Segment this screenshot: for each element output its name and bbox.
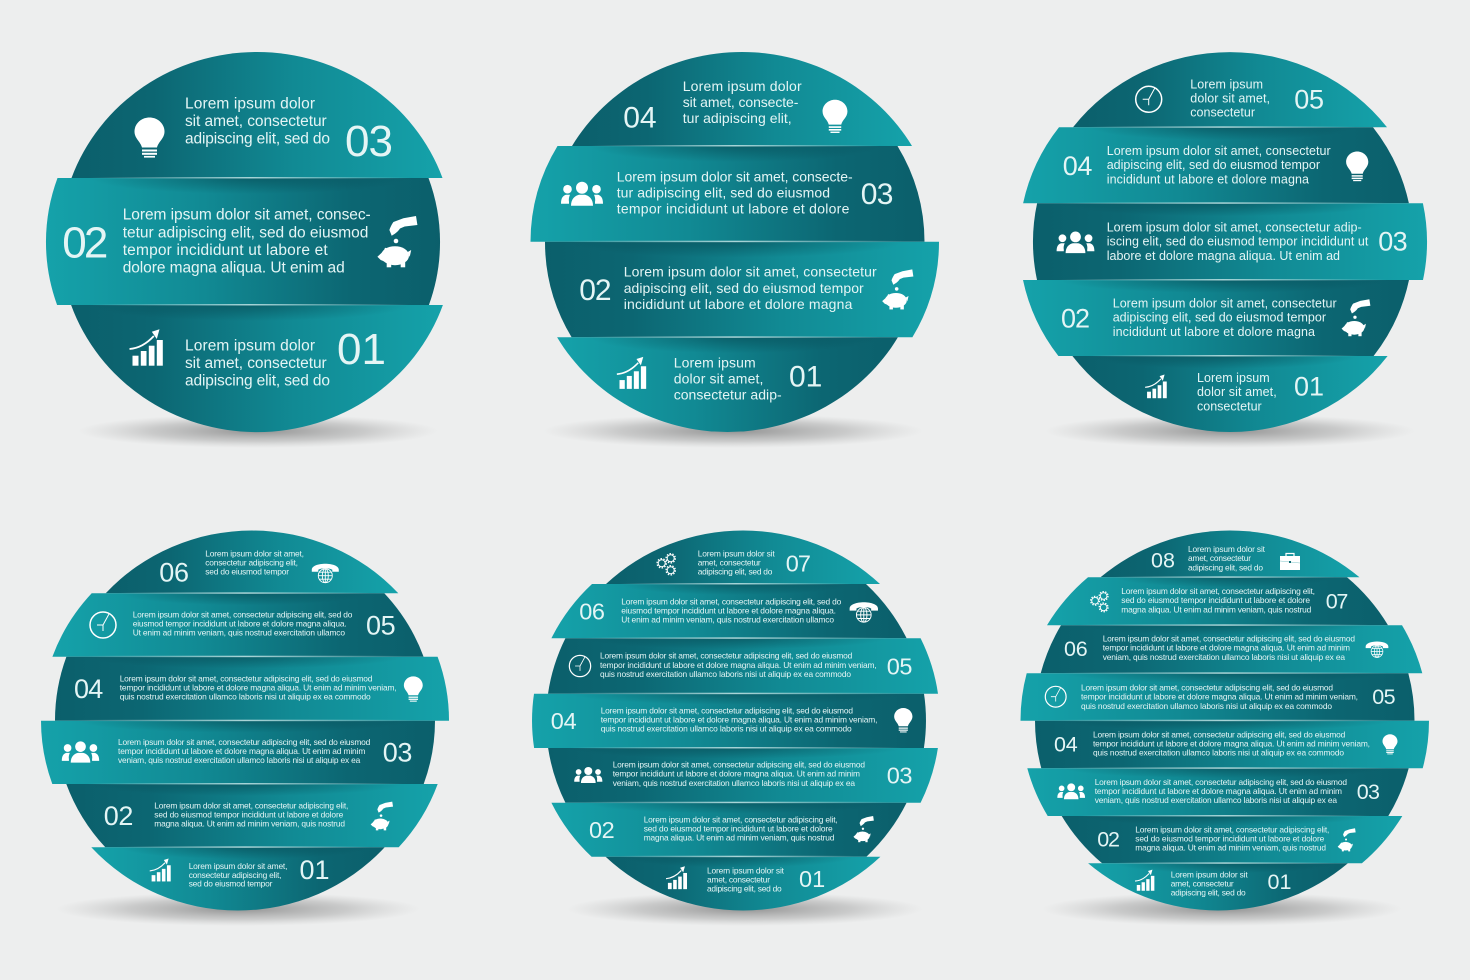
text block 02: Lorem ipsum dolor sit amet, consec- xyxy=(123,206,371,223)
band 02 xyxy=(545,241,939,337)
text block 02: sed do eiusmod tempor incididunt ut labore et dolore xyxy=(644,823,833,833)
icon: gears xyxy=(657,554,675,575)
text block 06: tempor incididunt ut labore et dolore magna aliqua. Ut enim ad minim xyxy=(1103,643,1350,653)
text block 07: amet, consectetur xyxy=(698,557,761,567)
text block 03: Lorem ipsum dolor sit amet, consectetur adipiscing elit, sed do eiusmod xyxy=(1095,777,1347,787)
number 04: 04 xyxy=(623,102,657,135)
text block 03 xyxy=(118,737,371,765)
text block 01 xyxy=(674,355,782,403)
icon: briefcase xyxy=(1280,554,1300,570)
text block 05: Lorem ipsum dolor sit amet, consectetur adipiscing elit, sed do eiusmod xyxy=(600,651,853,661)
text block 02: Lorem ipsum dolor sit amet, consectetur adipiscing elit, xyxy=(1135,824,1329,834)
icon: light bulb xyxy=(1382,734,1398,754)
text block 02: magna aliqua. Ut enim ad minim veniam, quis nostrud xyxy=(154,819,345,829)
text block 01 xyxy=(1197,371,1277,413)
text block 03: tempor incididunt ut labore et dolore xyxy=(617,201,850,217)
text block 06: sed do eiusmod tempor xyxy=(205,567,289,577)
text block 05 xyxy=(600,651,877,679)
text block 02: sed do eiusmod tempor incididunt ut labore et dolore xyxy=(1135,833,1325,843)
text block 04: Lorem ipsum dolor sit amet, consectetur adipiscing elit, sed do eiusmod xyxy=(120,674,373,684)
number 03: 03 xyxy=(1378,227,1408,257)
icon: globe phone xyxy=(1366,641,1388,657)
text block 02: Lorem ipsum dolor sit amet, consectetur xyxy=(624,264,877,280)
infographic: five-slice circle xyxy=(1023,52,1427,432)
band 06 xyxy=(106,531,398,593)
text block 01: Lorem ipsum xyxy=(1197,371,1270,385)
icon: light bulb xyxy=(1346,152,1368,181)
text block 03: tempor incididunt ut labore et dolore magna aliqua. Ut enim ad minim xyxy=(118,746,365,756)
text block 04: sit amet, consecte- xyxy=(683,94,799,110)
band 05 xyxy=(52,592,424,657)
number 03: 03 xyxy=(1357,780,1380,804)
text block 02: magna aliqua. Ut enim ad minim veniam, quis nostrud xyxy=(1135,842,1326,852)
number 04: 04 xyxy=(1063,151,1092,181)
text block 01: amet, consectetur xyxy=(1171,879,1234,889)
number 06: 06 xyxy=(1064,637,1088,661)
number 02: 02 xyxy=(1061,303,1090,333)
icon: hand and piggy bank xyxy=(882,269,913,309)
text block 08: amet, consectetur xyxy=(1188,553,1251,563)
text block 02: dolore magna aliqua. Ut enim ad xyxy=(123,259,345,276)
text block 01: dolor sit amet, xyxy=(1197,385,1277,399)
text block 05: tempor incididunt ut labore et dolore magna aliqua. Ut enim ad minim veniam, xyxy=(600,660,877,670)
ground shadows xyxy=(56,414,1415,926)
text block 01: adipiscing elit, sed do xyxy=(185,373,330,390)
band 03 xyxy=(72,52,442,178)
number 06: 06 xyxy=(579,598,605,624)
band 01 xyxy=(91,846,385,910)
icon: people xyxy=(574,767,602,783)
text block 05: eiusmod tempor incididunt ut labore et dolore magna aliqua. xyxy=(133,619,347,629)
text block 07: magna aliqua. Ut enim ad minim veniam, quis nostrud xyxy=(1121,604,1312,614)
number 02: 02 xyxy=(579,274,612,307)
text block 04: Lorem ipsum dolor xyxy=(683,78,802,94)
text block 04: Lorem ipsum dolor sit amet, consectetur adipiscing elit, sed do eiusmod xyxy=(601,705,853,715)
text block 05 xyxy=(1190,77,1270,120)
icon: hand and piggy bank xyxy=(853,816,874,842)
text block 03: tur adipiscing elit, sed do eiusmod xyxy=(617,185,830,201)
text block 06: Lorem ipsum dolor sit amet, xyxy=(205,549,304,559)
band 08 xyxy=(1100,530,1360,577)
band 07 xyxy=(1047,576,1388,625)
text block 02: magna aliqua. Ut enim ad minim veniam, quis nostrud xyxy=(644,832,835,842)
icon: hand and piggy bank xyxy=(1342,299,1370,336)
number 01: 01 xyxy=(799,866,825,892)
number 03: 03 xyxy=(861,178,893,211)
text block 07 xyxy=(698,548,775,576)
text block 02: Lorem ipsum dolor sit amet, consectetur adipiscing elit, xyxy=(644,814,838,824)
number 01: 01 xyxy=(300,855,330,885)
text block 08: Lorem ipsum dolor sit xyxy=(1188,544,1266,554)
text block 01: adipiscing elit, sed do xyxy=(1171,888,1246,898)
text block 07: adipiscing elit, sed do xyxy=(698,566,773,576)
text block 01: consectetur adip- xyxy=(674,387,782,403)
icon: hand and piggy bank xyxy=(377,216,417,267)
text block 07: sed do eiusmod tempor incididunt ut labore et dolore xyxy=(1121,595,1310,605)
text block 01: consectetur xyxy=(1197,399,1262,413)
text block 03: tempor incididunt ut labore et dolore magna aliqua. Ut enim ad minim xyxy=(1095,786,1342,796)
band 07 xyxy=(606,531,880,584)
text block 04: Lorem ipsum dolor sit amet, consectetur adipiscing elit, sed do eiusmod xyxy=(1093,729,1346,739)
text block 04: tur adipiscing elit, xyxy=(683,110,792,126)
text block 07 xyxy=(1121,586,1315,614)
icon: light bulb xyxy=(894,708,912,732)
text block 01: consectetur adipiscing elit, xyxy=(189,870,281,880)
text block 02: tempor incididunt ut labore et xyxy=(123,242,328,259)
text block 02: tetur adipiscing elit, sed do eiusmod xyxy=(123,224,368,241)
text block 03: Lorem ipsum dolor xyxy=(185,95,315,112)
number 01: 01 xyxy=(789,361,822,394)
text block 06 xyxy=(205,549,304,577)
text block 04 xyxy=(120,674,397,702)
text block 03 xyxy=(1107,221,1369,263)
text block 07: Lorem ipsum dolor sit xyxy=(698,548,775,558)
icon: hand and piggy bank xyxy=(371,802,393,830)
text block 05: consectetur xyxy=(1190,106,1255,120)
text block 02 xyxy=(154,801,348,829)
icon: growth chart xyxy=(1145,375,1167,398)
band 05 xyxy=(548,637,938,694)
icon: globe phone xyxy=(850,602,878,622)
text block 04 xyxy=(1093,729,1370,757)
band 02 xyxy=(1023,279,1409,356)
icon: growth chart xyxy=(617,357,646,389)
text block 06: Ut enim ad minim veniam, quis nostrud exercitation ullamco xyxy=(621,614,834,624)
text block 05: Lorem ipsum dolor sit amet, consectetur adipiscing elit, sed do xyxy=(133,610,353,620)
number 07: 07 xyxy=(786,551,811,577)
text block 04: adipiscing elit, sed do eiusmod tempor xyxy=(1107,158,1320,172)
number 04: 04 xyxy=(1054,733,1078,757)
icon: clock xyxy=(569,655,591,677)
text block 04 xyxy=(683,78,802,126)
text block 04: quis nostrud exercitation ullamco laboris nisi ut aliquip ex ea commodo xyxy=(601,723,852,733)
text block 04: quis nostrud exercitation ullamco laboris nisi ut aliquip ex ea commodo xyxy=(120,692,371,702)
band 04 xyxy=(1035,720,1429,768)
icon: people xyxy=(561,182,603,206)
icon: hand and piggy bank xyxy=(1338,828,1356,851)
number 05: 05 xyxy=(1372,685,1396,709)
text block 04 xyxy=(601,705,877,733)
text block 04: incididunt ut labore et dolore magna xyxy=(1107,172,1309,186)
number 02: 02 xyxy=(589,817,615,843)
number 01: 01 xyxy=(1294,372,1324,402)
number 01: 01 xyxy=(1268,870,1291,894)
icon: light bulb xyxy=(134,118,164,158)
band 04 xyxy=(532,693,926,748)
text block 06 xyxy=(1103,634,1355,662)
text block 03 xyxy=(1095,777,1347,805)
text block 04: Lorem ipsum dolor sit amet, consectetur xyxy=(1107,144,1331,158)
text block 02: Lorem ipsum dolor sit amet, consectetur adipiscing elit, xyxy=(154,801,348,811)
band 02 xyxy=(1062,815,1402,863)
text block 04: tempor incididunt ut labore et dolore magna aliqua. Ut enim ad minim veniam, xyxy=(1093,738,1370,748)
band 06 xyxy=(1041,624,1422,673)
text block 01: Lorem ipsum dolor sit xyxy=(1171,870,1248,880)
text block 03 xyxy=(185,95,330,147)
text block 01: amet, consectetur xyxy=(707,874,770,884)
number 02: 02 xyxy=(104,801,133,831)
number 07: 07 xyxy=(1326,590,1348,614)
text block 03 xyxy=(613,760,865,788)
icon: growth chart xyxy=(130,329,163,366)
infographic: seven-slice circle xyxy=(532,531,938,911)
text block 01: adipiscing elit, sed do xyxy=(707,883,782,893)
text block 05: Lorem ipsum dolor sit amet, consectetur adipiscing elit, sed do eiusmod xyxy=(1081,683,1333,693)
text block 04: tempor incididunt ut labore et dolore magna aliqua. Ut enim ad minim veniam, xyxy=(601,714,877,724)
number 04: 04 xyxy=(74,674,103,704)
text block 01 xyxy=(707,865,785,893)
text block 06: veniam, quis nostrud exercitation ullamco laboris nisi ut aliquip ex ea xyxy=(1103,652,1345,662)
band 05 xyxy=(1020,672,1414,721)
text block 02 xyxy=(624,264,877,312)
text block 02: incididunt ut labore et dolore magna xyxy=(1113,325,1315,339)
text block 02: Lorem ipsum dolor sit amet, consectetur xyxy=(1113,297,1337,311)
text block 03: veniam, quis nostrud exercitation ullamco laboris nisi ut aliquip ex ea xyxy=(1095,795,1337,805)
band 04 xyxy=(55,656,449,721)
band 03 xyxy=(530,145,924,242)
number 01: 01 xyxy=(337,325,386,374)
icon: light bulb xyxy=(404,676,423,702)
band 05 xyxy=(1073,52,1387,127)
text block 05: quis nostrud exercitation ullamco laboris nisi ut aliquip ex ea commodo xyxy=(600,669,851,679)
text block 06 xyxy=(621,596,842,624)
number 03: 03 xyxy=(383,737,412,767)
text block 08: adipiscing elit, sed do xyxy=(1188,562,1263,572)
infographic: eight-slice circle xyxy=(1020,530,1429,910)
number 05: 05 xyxy=(1294,84,1324,114)
text block 04: quis nostrud exercitation ullamco laboris nisi ut aliquip ex ea commodo xyxy=(1093,747,1344,757)
number 03: 03 xyxy=(887,762,912,788)
number 04: 04 xyxy=(551,708,577,734)
band 03 xyxy=(548,747,938,803)
text block 02: adipiscing elit, sed do eiusmod tempor xyxy=(624,280,864,296)
text block 03: Lorem ipsum dolor sit amet, consecte- xyxy=(617,169,853,185)
text block 02 xyxy=(644,814,838,842)
number 08: 08 xyxy=(1151,549,1175,573)
number 02: 02 xyxy=(62,218,108,267)
text block 03: Lorem ipsum dolor sit amet, consectetur adipiscing elit, sed do eiusmod xyxy=(613,760,865,770)
text block 02 xyxy=(123,206,371,276)
text block 02 xyxy=(1135,824,1329,852)
icon: globe phone xyxy=(312,564,339,583)
band 01 xyxy=(1088,862,1348,910)
number 05: 05 xyxy=(366,610,396,640)
band 02 xyxy=(46,177,440,305)
text block 03: veniam, quis nostrud exercitation ullamco laboris nisi ut aliquip ex ea xyxy=(613,778,855,788)
text block 05: quis nostrud exercitation ullamco laboris nisi ut aliquip ex ea commodo xyxy=(1081,701,1332,711)
text block 02: adipiscing elit, sed do eiusmod tempor xyxy=(1113,311,1326,325)
text block 03 xyxy=(617,169,853,217)
text block 07: Lorem ipsum dolor sit amet, consectetur adipiscing elit, xyxy=(1121,586,1315,596)
text block 01 xyxy=(1171,870,1248,898)
icon: gears xyxy=(1091,592,1108,612)
band 01 xyxy=(606,856,880,911)
band 02 xyxy=(66,783,438,847)
text block 06: consectetur adipiscing elit, xyxy=(205,558,298,568)
text block 01: dolor sit amet, xyxy=(674,371,763,387)
infographic: four-slice circle xyxy=(530,52,939,432)
band 01 xyxy=(1072,355,1388,432)
text block 03: Lorem ipsum dolor sit amet, consectetur adipiscing elit, sed do eiusmod xyxy=(118,737,371,747)
text block 05: Lorem ipsum xyxy=(1190,77,1263,91)
text block 04 xyxy=(1107,144,1331,186)
text block 01 xyxy=(189,861,287,889)
number 06: 06 xyxy=(159,558,189,588)
text block 06: eiusmod tempor incididunt ut labore et dolore magna aliqua. xyxy=(621,605,836,615)
text block 01: Lorem ipsum dolor sit xyxy=(707,865,785,875)
text block 03: labore et dolore magna aliqua. Ut enim ad xyxy=(1107,249,1340,263)
text block 01: Lorem ipsum dolor xyxy=(185,338,315,355)
icon: clock xyxy=(1045,686,1066,707)
text block 03: iscing elit, sed do eiusmod tempor incididunt ut xyxy=(1107,235,1369,249)
number 05: 05 xyxy=(887,653,912,679)
text block 06: Lorem ipsum dolor sit amet, consectetur adipiscing elit, sed do eiusmod xyxy=(1103,634,1355,644)
text block 05: Ut enim ad minim veniam, quis nostrud exercitation ullamco xyxy=(133,628,345,638)
band 04 xyxy=(572,52,912,146)
text block 01: sit amet, consectetur xyxy=(185,355,327,372)
text block 03: adipiscing elit, sed do xyxy=(185,130,330,147)
band 04 xyxy=(1023,126,1409,203)
band 01 xyxy=(71,304,443,432)
icon: growth chart xyxy=(666,866,687,889)
band 03 xyxy=(41,720,435,784)
icon: clock xyxy=(1136,86,1162,112)
text block 04: tempor incididunt ut labore et dolore magna aliqua. Ut enim ad minim veniam, xyxy=(120,683,397,693)
text block 03: veniam, quis nostrud exercitation ullamco laboris nisi ut aliquip ex ea xyxy=(118,755,361,765)
band 02 xyxy=(551,802,907,857)
icon: growth chart xyxy=(1135,870,1154,891)
icon: people xyxy=(1057,783,1085,799)
text block 02: incididunt ut labore et dolore magna xyxy=(624,296,853,312)
text block 03: tempor incididunt ut labore et dolore magna aliqua. Ut enim ad minim xyxy=(613,769,860,779)
text block 03: sit amet, consectetur xyxy=(185,113,327,130)
text block 05 xyxy=(133,610,353,638)
text block 02 xyxy=(1113,297,1337,339)
text block 05 xyxy=(1081,683,1358,711)
band 01 xyxy=(557,336,898,432)
text block 01: Lorem ipsum dolor sit amet, xyxy=(189,861,287,871)
text block 02: sed do eiusmod tempor incididunt ut labore et dolore xyxy=(154,810,344,820)
text block 05: tempor incididunt ut labore et dolore magna aliqua. Ut enim ad minim veniam, xyxy=(1081,692,1358,702)
text block 06: Lorem ipsum dolor sit amet, consectetur adipiscing elit, sed do xyxy=(621,596,842,606)
number 02: 02 xyxy=(1097,828,1120,852)
infographic: six-slice circle xyxy=(41,531,449,910)
icon: people xyxy=(1057,232,1094,253)
band 03 xyxy=(1033,202,1427,280)
icon: light bulb xyxy=(823,100,847,133)
text block 05: dolor sit amet, xyxy=(1190,91,1270,105)
text block 01: sed do eiusmod tempor xyxy=(189,879,273,889)
band 03 xyxy=(1027,767,1409,816)
text block 01 xyxy=(185,338,330,390)
icon: clock xyxy=(90,612,116,638)
text block 01: Lorem ipsum xyxy=(674,355,756,371)
icon: growth chart xyxy=(150,859,171,881)
band 06 xyxy=(551,583,907,638)
infographic: three-slice circle xyxy=(46,52,443,432)
number 03: 03 xyxy=(345,117,393,166)
text block 03: Lorem ipsum dolor sit amet, consectetur adip- xyxy=(1107,221,1362,235)
text block 08 xyxy=(1188,544,1266,572)
icon: people xyxy=(62,741,99,763)
